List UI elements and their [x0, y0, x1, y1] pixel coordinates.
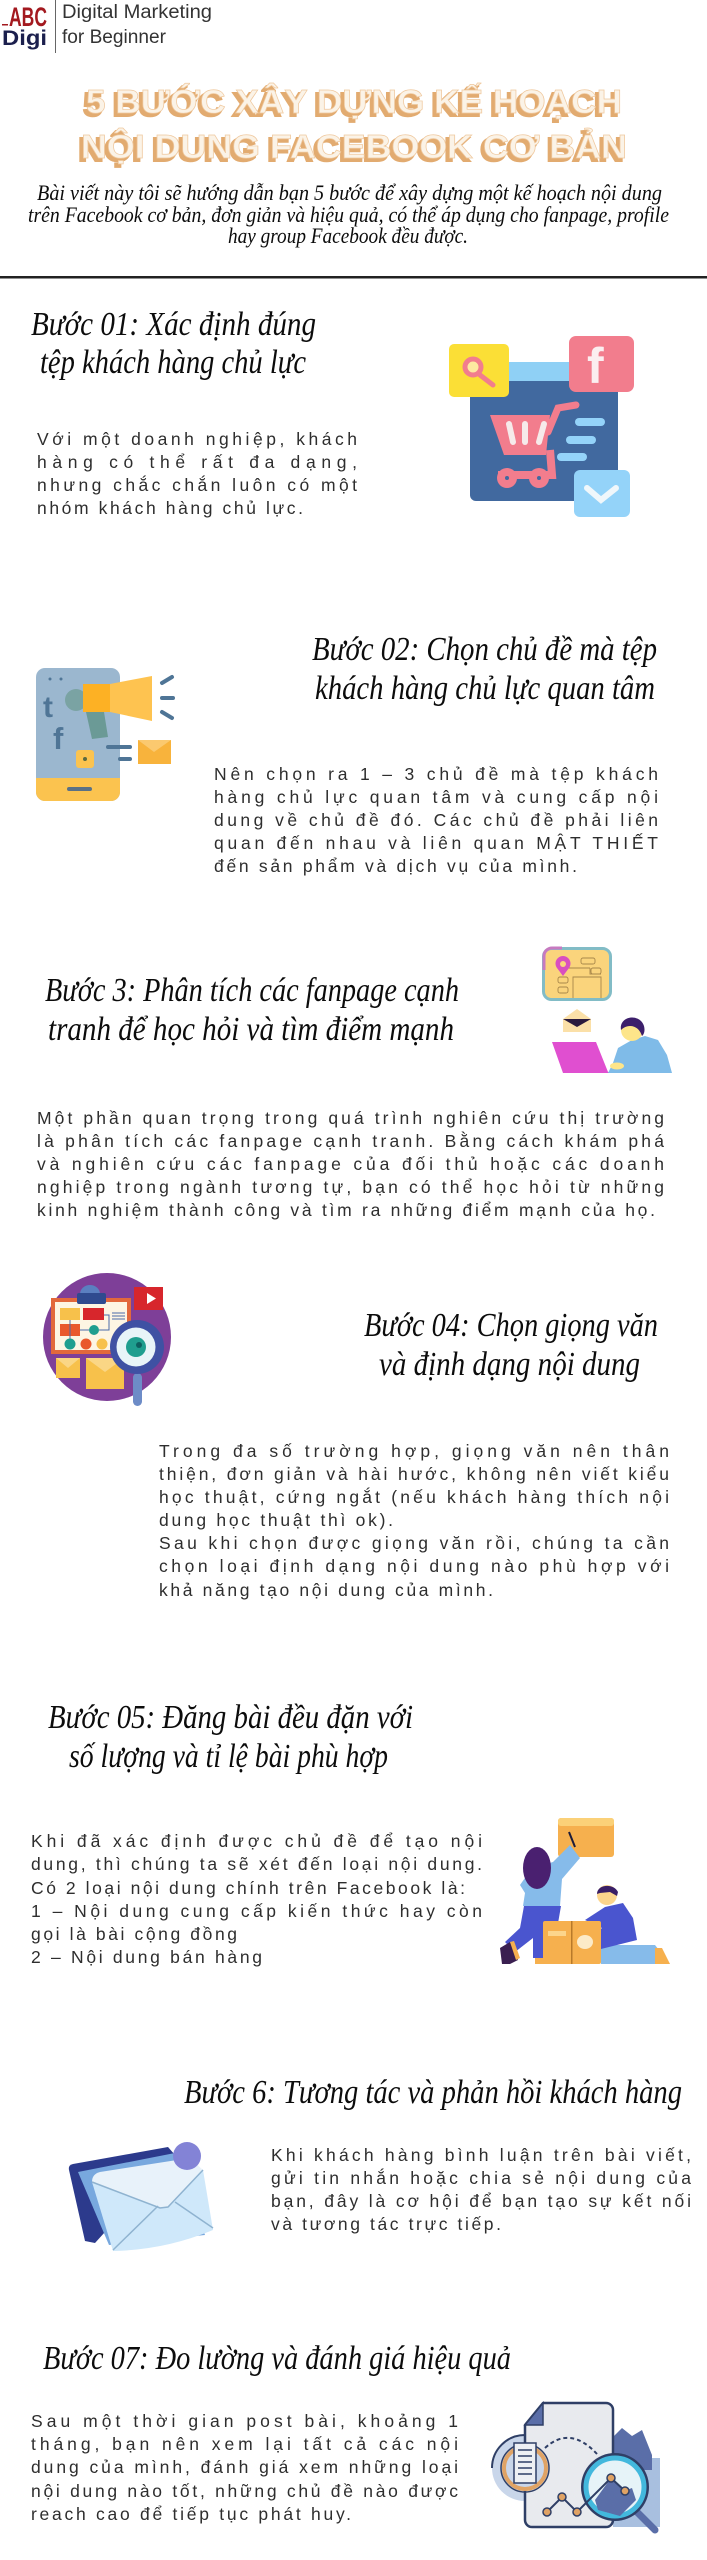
icon: person at laptop with map — [544, 948, 672, 1073]
text: step 2 body: hàng chủ lực quan tâm và cung cấp nội — [214, 787, 658, 807]
heading: step 4: Bước 04: Chọn giọng văn — [364, 1307, 658, 1344]
logo: ABC Digi — [2, 0, 212, 53]
text: step 6 body: và tương tác trực tiếp. — [271, 2214, 501, 2234]
text: step 1 body: nhưng chắc chắn luôn có một — [37, 474, 357, 495]
logo: ABC Digi: for Beginner — [62, 27, 167, 48]
text: step 4 body: dung học thuật thì ok). — [159, 1510, 393, 1530]
heading: step 5 — [48, 1699, 413, 1775]
logo: ABC Digi: Digital Marketing — [62, 2, 212, 23]
heading: step 1: tệp khách hàng chủ lực — [40, 344, 306, 381]
text: step 4 body: Trong đa số trường hợp, giọng văn nên thân — [159, 1441, 669, 1461]
panel: step 1 — [31, 306, 634, 518]
title: NỘI DUNG FACEBOOK CƠ BẢN — [81, 127, 627, 165]
intro text: Bài viết này tôi sẽ hướng dẫn bạn 5 bước để xây dựng một kế hoạch nội dung — [37, 180, 662, 205]
text: step 7 body — [31, 2411, 458, 2524]
logo: ABC Digi: ABC — [9, 2, 47, 32]
text: step 2 body: Nên chọn ra 1 – 3 chủ đề mà tệp khách — [214, 764, 658, 784]
text: step 2 body — [214, 764, 658, 876]
icon: purple circle with flowchart and magnifier — [43, 1273, 171, 1406]
title: NỘI DUNG FACEBOOK CƠ BẢN — [78, 130, 624, 168]
panel: step 2 — [36, 631, 658, 876]
text: step 6 body — [271, 2145, 691, 2234]
text: step 4 body: khả năng tạo nội dung của mình. — [159, 1580, 493, 1600]
heading: step 3: Bước 3: Phân tích các fanpage cạnh — [45, 972, 459, 1009]
text: step 3 body: kinh nghiệm thành công và tìm ra những điểm mạnh của họ. — [37, 1200, 655, 1220]
heading: step 2: Bước 02: Chọn chủ đề mà tệp — [312, 631, 657, 668]
text: step 2 body: dung về chủ đề đó. Các chủ đề phải liên — [214, 810, 658, 830]
text: step 7 body: tháng, bạn nên xem lại tất cả các nội — [31, 2434, 458, 2454]
text: step 7 body: nội dung nào tốt, những chủ đề nào được — [31, 2481, 458, 2501]
panel: step 3 — [37, 948, 672, 1220]
text: step 6 body: bạn, đây là cơ hội để bạn tạo sự kết nối — [271, 2191, 691, 2211]
heading: step 3 — [45, 972, 459, 1048]
text: step 7 body: Sau một thời gian post bài, khoảng 1 — [31, 2411, 458, 2431]
intro text — [28, 180, 669, 248]
text: step 5 body: 1 – Nội dung cung cấp kiến thức hay còn — [31, 1901, 482, 1921]
text: step 1 body: Với một doanh nghiệp, khách — [37, 429, 357, 449]
heading: step 1: Bước 01: Xác định đúng — [31, 306, 316, 343]
text: step 3 body: và nghiên cứu các fanpage của đối thủ hoặc các doanh — [37, 1154, 664, 1174]
heading: step 1 — [31, 306, 316, 381]
text: step 3 body — [37, 1108, 664, 1220]
icon: report with magnifier — [492, 2403, 660, 2530]
icon: shopping cart on page: f — [587, 338, 604, 394]
icon: two people with boxes — [500, 1818, 670, 1964]
text: step 5 body: Có 2 loại nội dung chính trên Facebook là: — [31, 1878, 465, 1898]
title: 5 BƯỚC XÂY DỰNG KẾ HOẠCH — [86, 83, 622, 120]
panel: step 7 — [31, 2340, 660, 2530]
text: step 3 body: nghiệp trong ngành tương tự, bạn có thể học hỏi từ những — [37, 1177, 664, 1197]
heading: step 5: số lượng và tỉ lệ bài phù hợp — [69, 1738, 388, 1775]
icon: shopping cart on page — [449, 336, 634, 517]
text: step 5 body: 2 – Nội dung bán hàng — [31, 1947, 262, 1967]
text: step 6 body: Khi khách hàng bình luận trên bài viết, — [271, 2145, 691, 2165]
text: step 7 body: reach cao để tiếp tục phát huy. — [31, 2504, 351, 2524]
text: step 1 body — [37, 429, 357, 518]
text: step 4 body: Sau khi chọn được giọng văn rồi, chúng ta cần — [159, 1533, 669, 1553]
text: step 4 body: chọn loại định dạng nội dung nào phù hợp với — [159, 1556, 669, 1576]
heading: step 4 — [364, 1307, 658, 1383]
text: step 3 body: là phân tích các fanpage cạnh tranh. Bằng cách khám phá — [37, 1130, 664, 1151]
text: step 2 body: quan đến nhau và liên quan MẬT THIẾT — [214, 832, 658, 853]
icon: phone with megaphone — [36, 668, 173, 801]
text: step 5 body — [31, 1831, 482, 1967]
text: step 5 body: dung, thì chúng ta sẽ xét đến loại nội dung. — [31, 1854, 482, 1874]
heading: step 4: và định dạng nội dung — [379, 1346, 640, 1383]
heading: step 2: khách hàng chủ lực quan tâm — [315, 670, 655, 707]
icon: envelope — [69, 2142, 213, 2251]
text: step 6 body: gửi tin nhắn hoặc chia sẻ nội dung của — [271, 2167, 691, 2188]
panel: step 4 — [43, 1273, 669, 1600]
heading: step 2 — [312, 631, 657, 707]
text: step 3 body: Một phần quan trọng trong quá trình nghiên cứu thị trường — [37, 1108, 664, 1128]
text: step 1 body: hàng có thể rất đa dạng, — [37, 452, 357, 472]
icon: phone with megaphone: t — [43, 691, 53, 724]
text: step 5 body: Khi đã xác định được chủ đề để tạo nội — [31, 1831, 482, 1851]
text: step 4 body: thiện, đơn giản và hài hước, không nên viết kiểu — [159, 1464, 669, 1484]
icon: phone with megaphone: f — [53, 721, 64, 756]
heading: step 5: Bước 05: Đăng bài đều đặn với — [48, 1699, 413, 1736]
logo: ABC Digi: Digi — [2, 27, 47, 50]
intro text: hay group Facebook đều được. — [228, 223, 468, 248]
text: step 7 body: dung của mình, đánh giá xem những loại — [31, 2457, 458, 2477]
title — [78, 83, 627, 168]
text: step 1 body: nhóm khách hàng chủ lực. — [37, 498, 303, 518]
text: step 2 body: đến sản phẩm và dịch vụ của mình. — [214, 856, 577, 876]
panel: step 5 — [31, 1699, 670, 1967]
text: step 4 body — [159, 1441, 669, 1600]
text: step 5 body: gọi là bài cộng đồng — [31, 1924, 237, 1944]
heading: step 7: Bước 07: Đo lường và đánh giá hiệu quả — [43, 2340, 511, 2377]
title: 5 BƯỚC XÂY DỰNG KẾ HOẠCH — [83, 86, 619, 123]
heading: step 3: tranh để học hỏi và tìm điểm mạnh — [48, 1011, 454, 1048]
text: step 4 body: học thuật, cứng ngắt (nếu khách hàng thích nội — [159, 1486, 669, 1507]
panel: step 6 — [69, 2074, 691, 2251]
